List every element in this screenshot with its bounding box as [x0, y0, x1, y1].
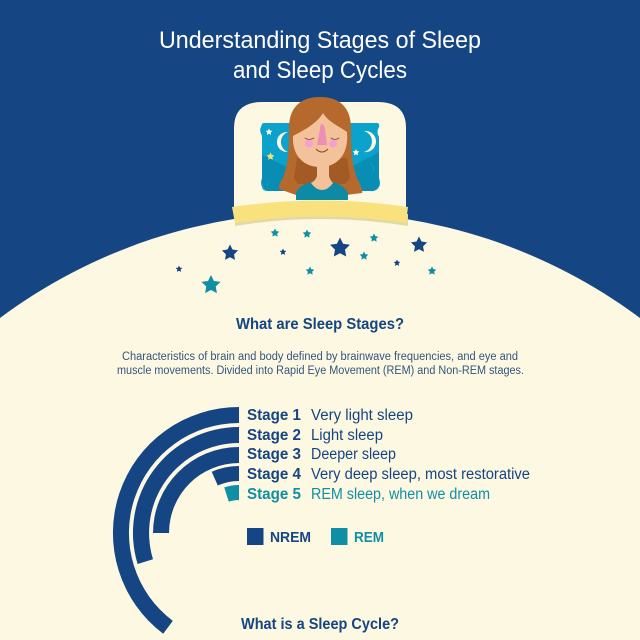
neck base: [311, 176, 333, 190]
heading: what is a sleep cycle: What is a Sleep Cycle?: [241, 616, 399, 633]
hair: [279, 97, 362, 195]
description text: [117, 351, 524, 377]
stage 4: Stage 4: [247, 466, 301, 483]
stage 2: Stage 2: [247, 427, 301, 444]
stage 5: [247, 486, 490, 503]
heading: what are sleep stages: What are Sleep Stages?: [236, 316, 404, 333]
arc: stage 1: [113, 407, 239, 634]
radial bar chart: stages: [113, 407, 239, 634]
legend: [247, 528, 384, 546]
title: Understanding Stages of Sleep: [159, 27, 481, 54]
stage 1: [247, 407, 413, 424]
legend: REM: REM: [354, 529, 384, 546]
illustration: sleeping girl in bed: [232, 97, 408, 226]
stage 3: Deeper sleep: [311, 446, 396, 463]
arc: stage 3: [153, 447, 239, 533]
stage 3: Stage 3: [247, 446, 301, 463]
eyes: [305, 138, 339, 140]
title: [159, 27, 481, 84]
nose: [317, 124, 327, 145]
stage 2: Light sleep: [311, 427, 383, 444]
inner hair: [294, 158, 350, 184]
mouth: [316, 149, 328, 152]
description text: Characteristics of brain and body defined by brainwave frequencies, and eye and: [122, 351, 518, 363]
description text: muscle movements. Divided into Rapid Eye Movement (REM) and Non-REM stages.: [117, 365, 524, 377]
arc: stage 2: [133, 427, 239, 564]
pillow: [260, 123, 380, 191]
stage list: [247, 407, 530, 503]
title: and Sleep Cycles: [233, 57, 407, 84]
cream hill background: [0, 212, 640, 640]
arc: stage 5: [224, 485, 239, 502]
shirt: [296, 182, 348, 200]
stage 4: Very deep sleep, most restorative: [311, 466, 530, 483]
arc: stage 4: [212, 466, 239, 486]
stage 1: Stage 1: [247, 407, 301, 424]
cheeks: [305, 140, 337, 148]
stage 1: Very light sleep: [311, 407, 413, 424]
stage 5: Stage 5: [247, 486, 301, 503]
legend: NREM: NREM: [270, 529, 311, 546]
headboard: [234, 102, 406, 212]
stars: [176, 228, 436, 293]
neck: [317, 160, 329, 184]
blanket shadow: [235, 210, 408, 226]
blanket: [232, 200, 408, 223]
face: [293, 113, 347, 167]
stage 5: REM sleep, when we dream: [311, 486, 490, 503]
stage 3: [247, 446, 396, 463]
stage 2: [247, 427, 383, 444]
